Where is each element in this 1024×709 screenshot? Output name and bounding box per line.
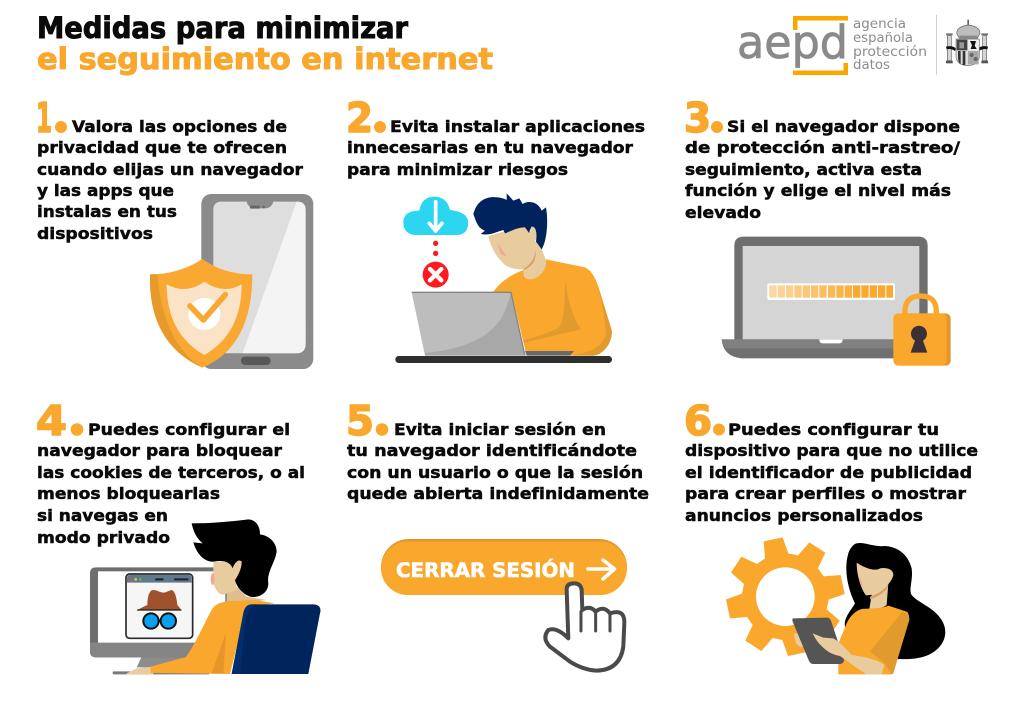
button: cerrar sesión: CERRAR SESIÓN bbox=[396, 558, 575, 582]
step 4 number bbox=[36, 397, 83, 445]
step 6 text bbox=[685, 420, 978, 525]
step 5 text: quede abierta indefinidamente bbox=[347, 484, 649, 503]
step 1 text: dispositivos bbox=[37, 224, 153, 243]
step 2 text: Evita instalar aplicaciones bbox=[390, 117, 645, 136]
panel: step 3 bbox=[684, 94, 960, 366]
step 3 text: función y elige el nivel más bbox=[685, 181, 951, 200]
step 3 text: seguimiento, activa esta bbox=[685, 160, 922, 179]
panel: step 5 bbox=[346, 397, 649, 671]
step 2 number: 2 bbox=[346, 94, 373, 142]
step 4 text bbox=[37, 420, 305, 547]
step 5 text: tu navegador identificándote bbox=[347, 441, 637, 460]
step 4 text: modo privado bbox=[37, 528, 170, 547]
step 3 text: de protección anti-rastreo/ bbox=[685, 138, 960, 157]
panel: step 1 bbox=[36, 94, 313, 369]
step 6 text: Puedes configurar tu bbox=[728, 420, 939, 439]
logo: aepd: agencia bbox=[853, 16, 906, 32]
step 4 number: 4 bbox=[36, 397, 67, 445]
title: Medidas para minimizar bbox=[37, 11, 409, 45]
step 1 text: Valora las opciones de bbox=[72, 117, 287, 136]
step 6 text: anuncios personalizados bbox=[685, 506, 923, 525]
step 3 text: elevado bbox=[685, 203, 761, 222]
step 6 text: el identificador de publicidad bbox=[685, 463, 972, 482]
panel: step 6 bbox=[684, 397, 978, 674]
step 6 number bbox=[684, 397, 725, 445]
logo: aepd: protección bbox=[853, 44, 927, 60]
illustration: man at laptop with blocked download bbox=[395, 193, 612, 363]
step 5 number bbox=[346, 397, 388, 445]
illustration: person at monitor in private mode bbox=[90, 519, 321, 674]
logo: aepd: española bbox=[853, 30, 913, 46]
step 5 text: Evita iniciar sesión en bbox=[394, 420, 606, 439]
step 2 text bbox=[347, 117, 645, 179]
icon: coat of arms bbox=[946, 20, 988, 66]
step 1 text: y las apps que bbox=[37, 181, 174, 200]
title: el seguimiento en internet bbox=[37, 42, 493, 76]
step 4 text: las cookies de terceros, o al bbox=[37, 463, 305, 482]
step 5 text bbox=[347, 420, 649, 503]
logo: aepd: datos bbox=[853, 57, 890, 73]
step 4 text: menos bloquearlas bbox=[37, 484, 220, 503]
title bbox=[37, 11, 493, 76]
step 1 text: privacidad que te ofrecen bbox=[37, 138, 287, 157]
step 1 text bbox=[37, 117, 303, 243]
button: cerrar sesión bbox=[381, 539, 627, 595]
step 3 number: 3 bbox=[684, 94, 711, 142]
step 2 text: para minimizar riesgos bbox=[347, 160, 568, 179]
illustration: woman with tablet and gear bbox=[726, 537, 945, 674]
step 1 text: instalas en tus bbox=[37, 202, 177, 221]
step 6 text: dispositivo para que no utilice bbox=[685, 441, 978, 460]
step 3 text: Si el navegador dispone bbox=[727, 117, 960, 136]
logo: aepd bbox=[737, 15, 937, 75]
step 2 text: innecesarias en tu navegador bbox=[347, 138, 633, 157]
step 5 text: con un usuario o que la sesión bbox=[347, 463, 643, 482]
panel: step 2 bbox=[346, 94, 645, 363]
step 6 number: 6 bbox=[684, 397, 712, 445]
step 1 number: 1 bbox=[36, 94, 52, 142]
step 4 text: navegador para bloquear bbox=[37, 441, 282, 460]
illustration: laptop with progress bar and padlock bbox=[722, 237, 951, 366]
step 6 text: para crear perfiles o mostrar bbox=[685, 484, 966, 503]
step 4 text: si navegas en bbox=[37, 506, 168, 525]
step 4 text: Puedes configurar el bbox=[88, 420, 290, 439]
icon: phone with shield bbox=[150, 194, 313, 369]
logo: aepd: aepd bbox=[737, 16, 848, 69]
panel: step 4 bbox=[36, 397, 321, 674]
step 3 text bbox=[685, 117, 960, 222]
step 1 text: cuando elijas un navegador bbox=[37, 160, 303, 179]
icon: pointing hand bbox=[545, 583, 624, 671]
step 5 number: 5 bbox=[346, 397, 374, 445]
